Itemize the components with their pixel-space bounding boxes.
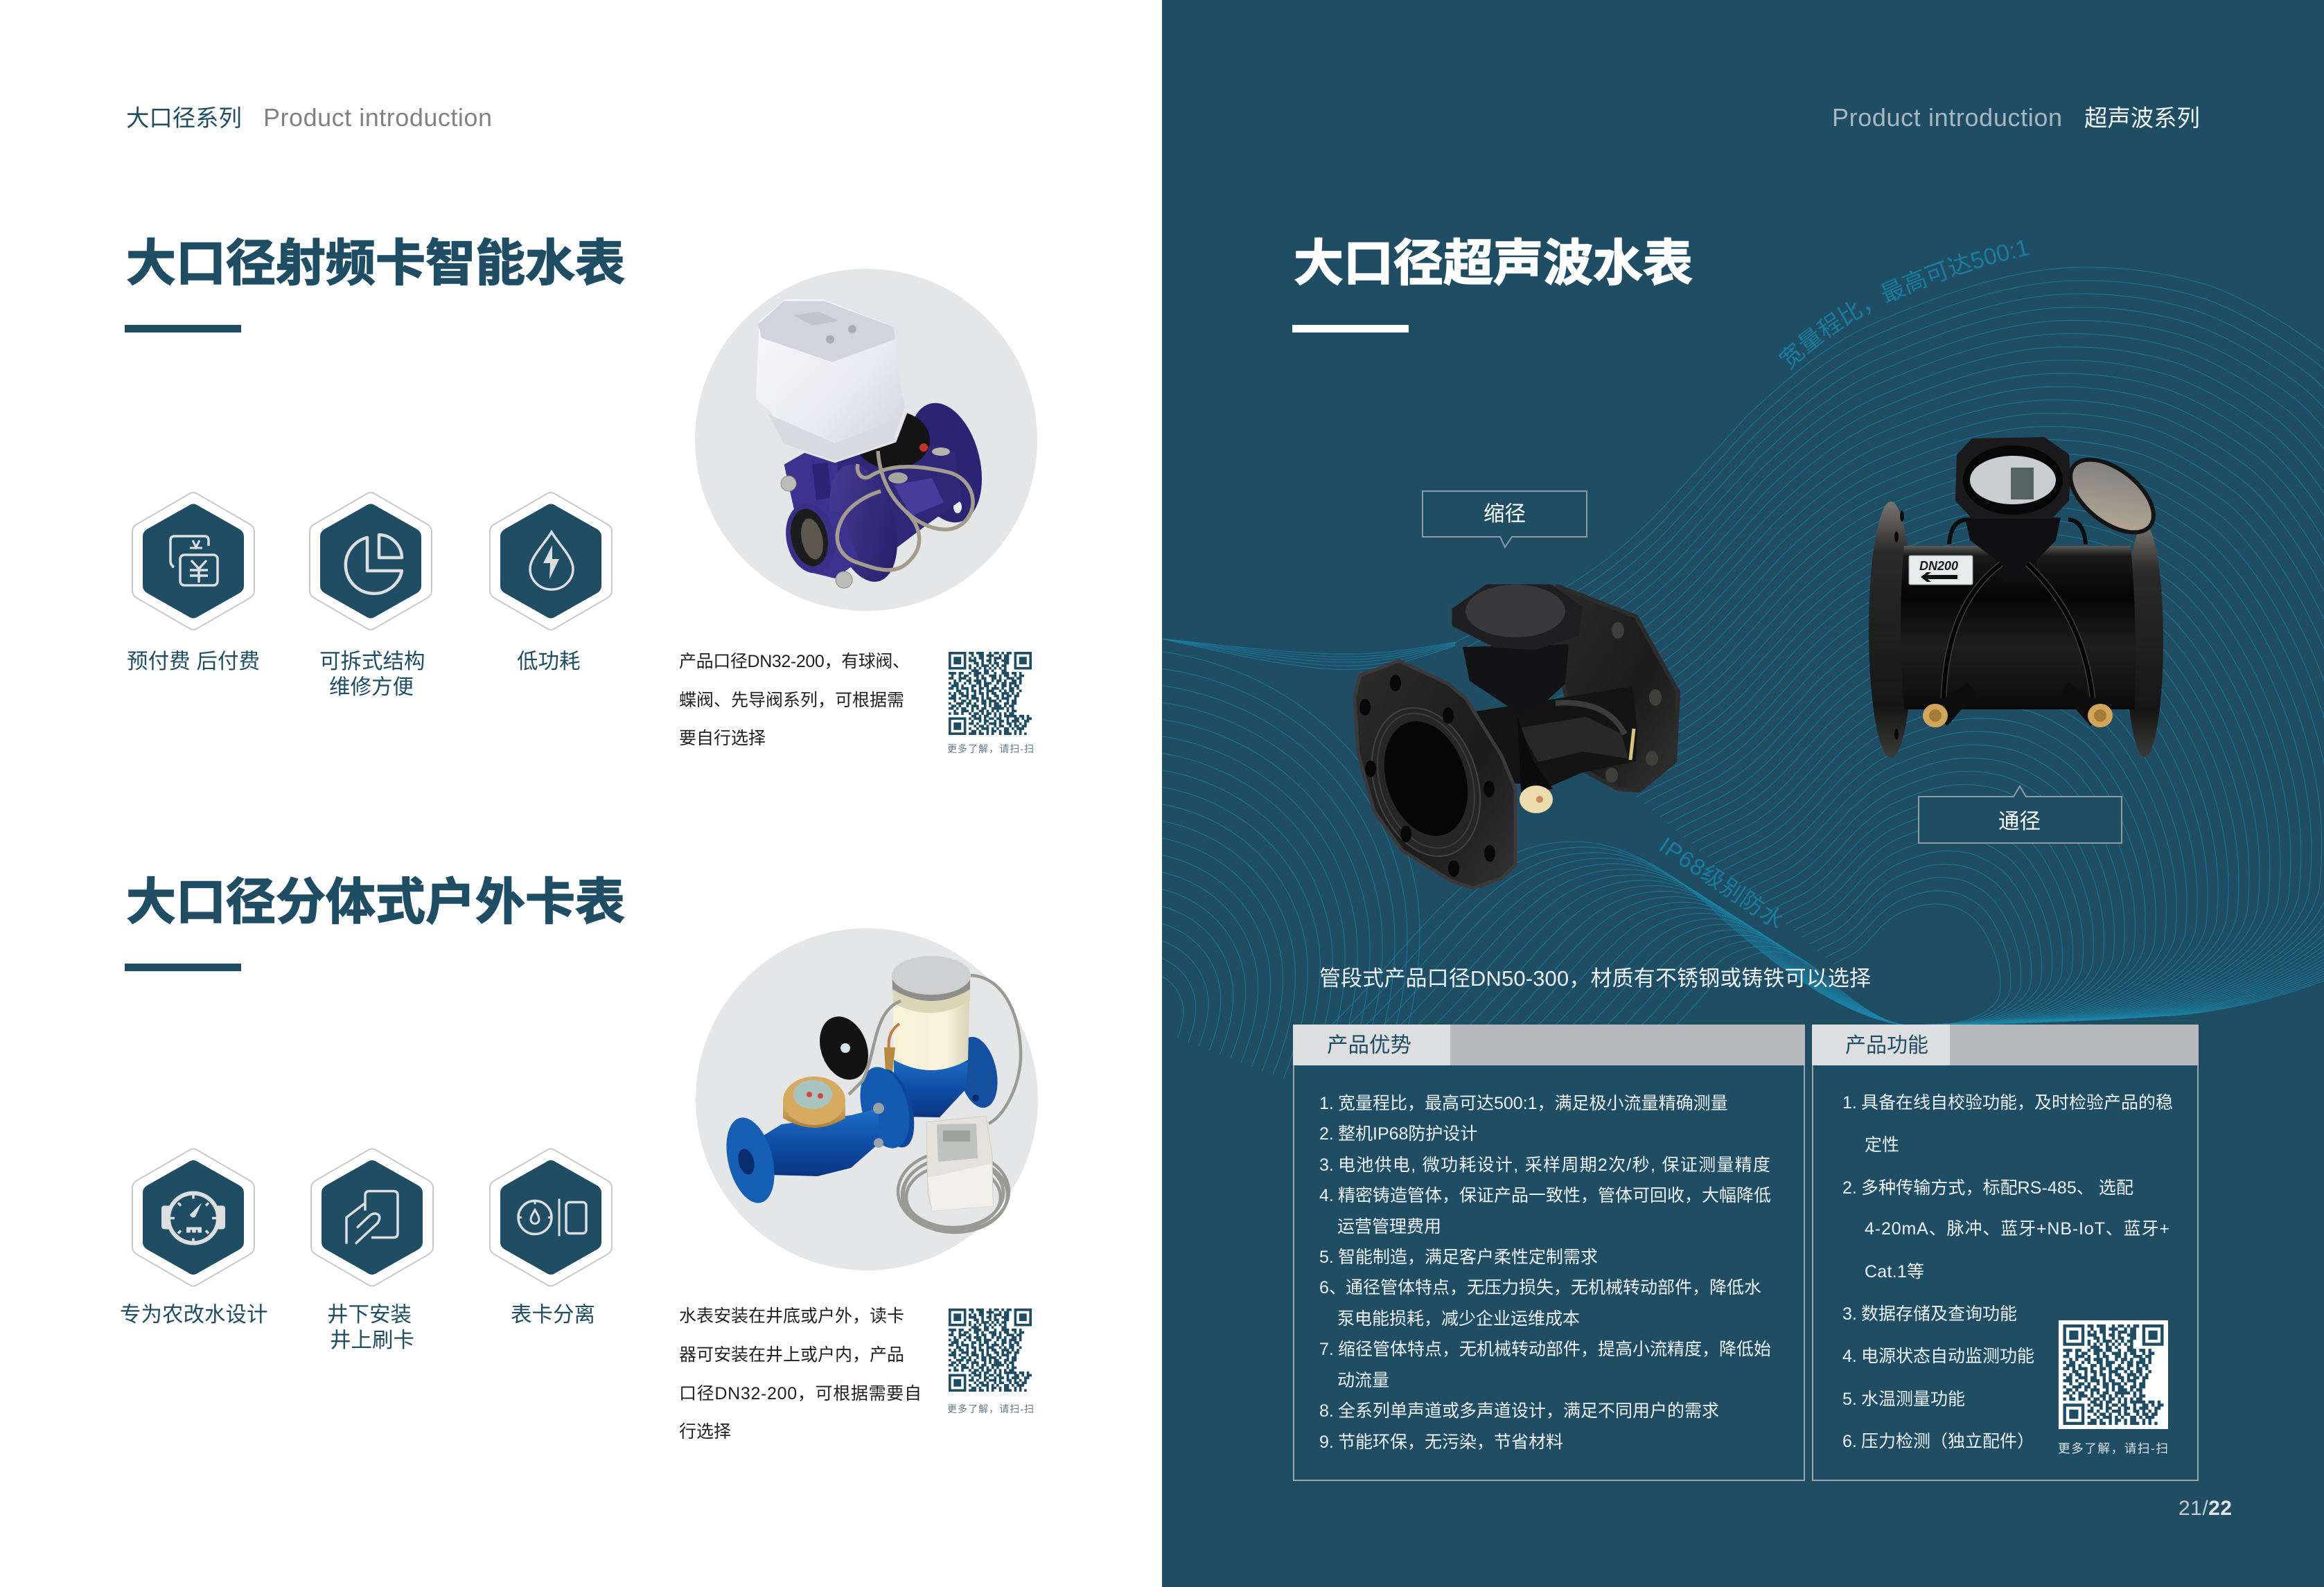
- advantage list: 5.: [1319, 1248, 1334, 1267]
- function list: 水温测量功能: [1861, 1390, 1965, 1409]
- inlet flange: [719, 1112, 782, 1208]
- function list: 2.: [1842, 1178, 1857, 1198]
- label: 专为农改水设计: [120, 1303, 267, 1327]
- cables: [849, 975, 1021, 1232]
- feature: agricultural water design: [120, 1149, 267, 1327]
- circle backdrop: [695, 269, 1037, 611]
- brass register: [783, 1101, 845, 1128]
- product photo: full-bore ultrasonic meter: DN200: [1919, 559, 1958, 573]
- advantage list: 6、: [1319, 1278, 1346, 1297]
- probe stem and brass tip: [1517, 717, 1553, 792]
- QR code 2: 更多了解，请扫-扫: [947, 1403, 1034, 1415]
- description: RF card meter: 蝶阀、先导阀系列，可根据需: [679, 691, 904, 710]
- panel header: 产品优势: [1327, 1034, 1411, 1057]
- right header: [1832, 103, 2200, 132]
- advantage list: 精密铸造管体，保证产品一致性，管体可回收，大幅降低: [1338, 1186, 1771, 1205]
- function list: 1.: [1842, 1093, 1857, 1112]
- description: pipe section sizes: 管段式产品口径DN50-300，材质有不锈钢或铸铁可以选择: [1319, 966, 1871, 991]
- function list: [1842, 1093, 2173, 1451]
- advantage list: 2.: [1319, 1124, 1334, 1144]
- copper and brass fitting: [889, 1024, 899, 1049]
- cream cylinder: [892, 977, 970, 1070]
- advantage list: 全系列单声道或多声道设计，满足不同用户的需求: [1338, 1401, 1719, 1421]
- description: RF card meter: [679, 652, 910, 748]
- head cap: [1454, 586, 1581, 648]
- advantage list: 3.: [1319, 1155, 1334, 1175]
- label: 可拆式结构: [319, 650, 425, 673]
- right flange: [2126, 524, 2163, 757]
- advantage list: 缩径管体特点，无机械转动部件，提高小流精度，降低始: [1338, 1340, 1771, 1359]
- function list: 3.: [1842, 1304, 1857, 1324]
- title: RF card meter: 大口径射频卡智能水表: [126, 236, 625, 292]
- advantage list: 泵电能损耗，减少企业运维成本: [1337, 1309, 1580, 1329]
- advantage list: 运营管理费用: [1337, 1217, 1441, 1236]
- watermark: wide range ratio: 宽量程比，最高可达500:1: [1778, 240, 2030, 370]
- curved pipe and body: [1462, 686, 1637, 786]
- description: split outdoor card meter: 水表安装在井底或户外，读卡: [679, 1306, 904, 1326]
- sensor tubes: [1944, 564, 2093, 698]
- icon: hexagon with hand and card: [311, 1149, 433, 1286]
- callout: full bore: [1919, 786, 2122, 843]
- chrome lid: [892, 956, 971, 995]
- meter body: [807, 443, 960, 547]
- title underline: [1292, 325, 1409, 333]
- panel header: [1293, 1025, 1805, 1065]
- flange face rings: [1354, 694, 1498, 870]
- description: split outdoor card meter: 器可安装在井上或户内，产品: [679, 1345, 904, 1365]
- panel header: 产品功能: [1845, 1034, 1928, 1057]
- advantage list: 智能制造，满足客户柔性定制需求: [1338, 1248, 1598, 1267]
- black register: [855, 411, 930, 469]
- braided wires: [837, 451, 973, 570]
- far flange: [897, 396, 994, 530]
- icon: hexagon with dial and card: [490, 1149, 612, 1286]
- left header: Product introduction: [263, 103, 492, 132]
- advantage list: 宽量程比，最高可达500:1，满足极小流量精确测量: [1338, 1094, 1728, 1113]
- page number: 21/22: [2178, 1497, 2232, 1520]
- label: 低功耗: [517, 650, 581, 673]
- white electronics box: [754, 297, 907, 461]
- function list: 具备在线自校验功能，及时检验产品的稳: [1861, 1093, 2173, 1112]
- icon: hexagon with pie chart: [310, 493, 432, 630]
- advantage list: 整机IP68防护设计: [1338, 1124, 1477, 1144]
- description: RF card meter: 产品口径DN32-200，有球阀、: [679, 652, 910, 671]
- near flange: [818, 456, 909, 589]
- description: split outdoor card meter: 口径DN32-200，可根据需要自: [679, 1384, 922, 1403]
- black lid: [825, 1060, 847, 1075]
- reader box: [926, 1116, 993, 1211]
- function list: 压力检测（独立配件）: [1861, 1432, 2034, 1451]
- panel header: [1812, 1025, 2199, 1065]
- QR code 1: [947, 653, 1034, 754]
- rear body: [894, 1058, 968, 1117]
- main pipe body: [758, 1108, 879, 1176]
- dial: [1963, 445, 2063, 515]
- function list: 电源状态自动监测功能: [1861, 1347, 2034, 1366]
- front flange: [1355, 661, 1515, 888]
- QR code 1: 更多了解，请扫-扫: [947, 743, 1034, 754]
- feature: prepaid and postpaid: [127, 493, 260, 673]
- icon: hexagon with yuan cards: [132, 493, 254, 630]
- label: 预付费 后付费: [127, 650, 260, 673]
- right header: 超声波系列: [2084, 106, 2200, 132]
- label: [327, 1303, 414, 1352]
- description: split outdoor card meter: 行选择: [679, 1422, 731, 1442]
- middle flange: [866, 1065, 922, 1152]
- watermark: IP68: IP68级别防水: [1655, 832, 1788, 934]
- advantage list: 8.: [1319, 1401, 1334, 1421]
- pipe body: [1901, 546, 2136, 709]
- advantage list: 通径管体特点，无压力损失，无机械转动部件，降低水: [1346, 1278, 1761, 1297]
- open lid: [2057, 445, 2167, 547]
- description: split outdoor card meter: [679, 1306, 922, 1442]
- left flange: [1869, 502, 1913, 758]
- title underline: [125, 964, 241, 971]
- label: 维修方便: [329, 675, 414, 699]
- product photo: full-bore ultrasonic meter: [1869, 438, 2167, 758]
- pipe mouth: [800, 506, 859, 578]
- handles: [1949, 520, 2086, 544]
- DN200 plate: [1909, 556, 1973, 585]
- advantage list: [1319, 1094, 1771, 1452]
- advantage list: 4.: [1319, 1186, 1334, 1205]
- head cap: [1957, 438, 2069, 517]
- title: ultrasonic water meter: 大口径超声波水表: [1294, 236, 1693, 292]
- rear right flange: [952, 1034, 1003, 1111]
- bore: [1371, 711, 1481, 846]
- feature: detachable structure: [310, 493, 432, 699]
- panel: product advantages: [1293, 1025, 1805, 1480]
- panel: left white page: [0, 0, 1162, 1587]
- label: 井下安装: [327, 1303, 412, 1327]
- left header: 大口径系列: [126, 106, 242, 132]
- brass ends: [1930, 682, 1976, 726]
- function list: 数据存储及查询功能: [1861, 1304, 2017, 1324]
- feature: install in well, swipe above: [311, 1149, 433, 1352]
- rear flange: [1545, 586, 1678, 790]
- head lower: [1965, 517, 2061, 583]
- product photo: reduced-bore ultrasonic meter: [1354, 585, 1678, 888]
- function list: 4-20mA、脉冲、蓝牙+NB-IoT、蓝牙+: [1865, 1219, 2169, 1239]
- title underline: [125, 325, 241, 333]
- advantage list: 9.: [1319, 1433, 1334, 1452]
- left header: [126, 103, 492, 132]
- product photo: split outdoor card meter: [696, 928, 1038, 1270]
- QR code 3: [2058, 1320, 2168, 1455]
- function list: 5.: [1842, 1390, 1857, 1409]
- description: RF card meter: 要自行选择: [679, 729, 766, 748]
- function list: 多种传输方式，标配RS-485、 选配: [1861, 1178, 2133, 1198]
- advantage list: 电池供电, 微功耗设计, 采样周期2次/秒, 保证测量精度: [1338, 1155, 1770, 1175]
- feature: meter and card separated: [490, 1149, 612, 1327]
- function list: 4.: [1842, 1347, 1857, 1366]
- callout: reduced bore: 缩径: [1484, 502, 1526, 526]
- advantage list: 节能环保，无污染，节省材料: [1338, 1433, 1563, 1452]
- panel: right dark page: [1162, 0, 2324, 1587]
- advantage list: 7.: [1319, 1340, 1334, 1359]
- icon: hexagon with gauge: [132, 1149, 254, 1286]
- background wave line pattern: [1145, 267, 2324, 1115]
- QR code 3: 更多了解，请扫-扫: [2058, 1442, 2168, 1455]
- clamp neck: [786, 454, 838, 513]
- feature: low power: [490, 493, 612, 673]
- advantage list: 1.: [1319, 1094, 1334, 1113]
- bolt holes: [1359, 675, 1495, 877]
- clamp bolts: [781, 476, 796, 491]
- QR code 2: [947, 1310, 1034, 1415]
- icon: hexagon with drop and bolt: [490, 493, 612, 630]
- chrome rim: [892, 975, 970, 1001]
- function list: 定性: [1865, 1135, 1899, 1155]
- callout: reduced bore: [1423, 491, 1587, 547]
- right header: Product introduction: [1832, 103, 2062, 132]
- title: split outdoor card meter: 大口径分体式户外卡表: [126, 875, 625, 930]
- circle backdrop: [696, 928, 1038, 1270]
- product photo: RF card smart meter: [695, 269, 1037, 611]
- advantage list: 动流量: [1337, 1371, 1389, 1390]
- panel: product functions: [1812, 1025, 2199, 1480]
- function list: 6.: [1842, 1432, 1857, 1451]
- label: 表卡分离: [511, 1303, 595, 1327]
- callout: full bore: 通径: [1998, 810, 2041, 833]
- label: 井上刷卡: [330, 1329, 414, 1352]
- label: [319, 650, 425, 699]
- head lower: [1463, 644, 1569, 713]
- function list: Cat.1等: [1865, 1262, 1924, 1282]
